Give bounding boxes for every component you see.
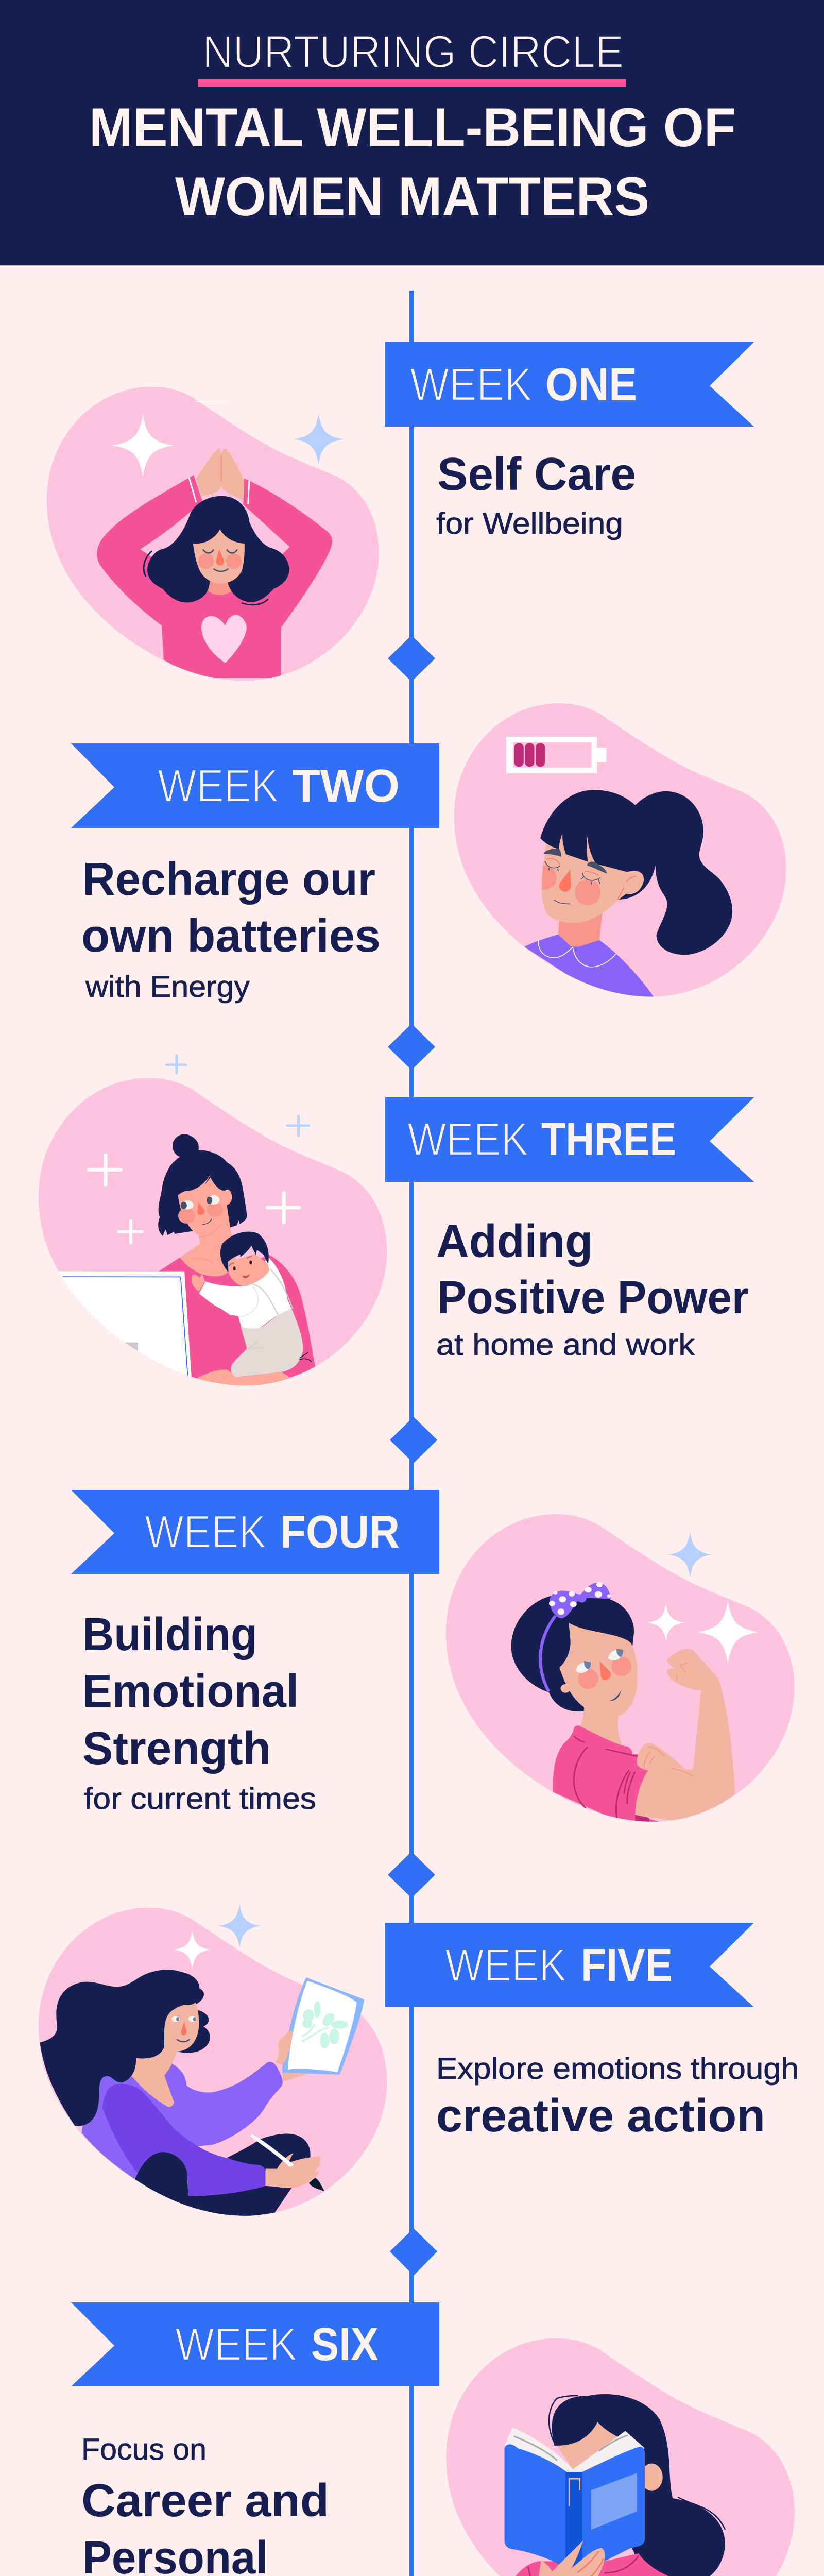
banner: week two: WEEK [158,760,279,812]
subheading: at home and work: at home and work [436,1328,695,1362]
figure: mother and baby [38,1134,316,1388]
banner: week one: ONE [545,359,637,411]
banner: week six [71,2302,439,2386]
eyebrow: nurturing circle: NURTURING CIRCLE [202,26,624,77]
heading: building emotional strength: Emotional [82,1666,299,1717]
heading: recharge our own batteries [81,854,381,962]
icon: sparkles [111,414,344,477]
computer monitor [59,1272,192,1377]
icon: sparkles [647,1532,759,1663]
figure: woman with ponytail [524,790,732,997]
panel: week six [71,2302,795,2576]
baby [199,1257,291,1329]
figure: woman with hands raised [97,448,332,678]
illustration: woman reading book [446,2338,795,2576]
heading: recharge our own batteries: Recharge our [82,854,375,905]
timeline line [409,291,414,2576]
banner: week five: FIVE [581,1940,673,1991]
subheading: for current times: for current times [84,1782,316,1816]
subheading: with energy: with Energy [85,970,250,1004]
icon: sparkles [173,1904,262,1969]
timeline diamonds [388,635,437,2576]
title: WOMEN MATTERS [175,165,649,227]
banner: week three: THREE [541,1114,676,1165]
banner: week five: WEEK [445,1940,566,1991]
icon: plus sparkles [89,1056,309,1243]
banner: week four [71,1490,439,1574]
icon: low battery [506,737,606,773]
icon: open blue book [505,2427,645,2568]
illustration: woman flexing arm [446,1514,795,1824]
title: MENTAL WELL-BEING OF [89,96,736,158]
banner: week one [385,342,754,427]
heading: adding positive power: Positive Power [437,1272,749,1324]
banner: week four: FOUR [280,1506,400,1558]
pink underline [198,79,626,87]
panel: week five [39,1904,799,2216]
heading: career and personal brand [81,2475,329,2576]
banner: week five [385,1923,754,2007]
heading: building emotional strength [82,1609,299,1774]
banner: week four: WEEK [145,1506,266,1558]
panel: week two [71,703,786,1004]
figure: reader [505,2394,725,2576]
banner: week one: WEEK [410,359,532,411]
heading: self care: Self Care [437,449,636,500]
heading: creative action: creative action [436,2090,765,2142]
figure: woman with brush [40,1970,324,2216]
icon: tablet with leaf drawing [275,1977,364,2075]
panel: week four [71,1490,795,1824]
illustration: tired woman with battery [454,703,786,997]
illustration: mother with baby at computer [38,1056,387,1388]
heading: building emotional strength: Building [82,1609,258,1660]
heading: career and personal brand: Career and [81,2475,329,2527]
heading: adding positive power: Adding [436,1216,593,1267]
panel: week one [47,342,754,681]
banner: week six: WEEK [175,2319,297,2370]
banner: week six: SIX [311,2319,379,2370]
text: focus on: Focus on [81,2433,207,2466]
figure: flexing woman with polka dot bow [511,1582,735,1824]
banner: week two: TWO [292,760,400,812]
banner: week two [71,743,439,828]
banner: week three [385,1097,754,1182]
panel: week three [38,1056,754,1388]
illustration: woman painting on tablet [39,1904,387,2216]
title [89,96,736,227]
heading: recharge our own batteries: own batteries [81,910,381,962]
heading: adding positive power [436,1216,749,1324]
header band [0,0,824,266]
icon: heart on sweater [201,615,247,663]
heading: building emotional strength: Strength [82,1723,271,1774]
subheading: for wellbeing: for Wellbeing [436,507,623,540]
text: explore emotions through: Explore emotions through [436,2052,799,2086]
illustration: meditating woman [47,387,379,681]
banner: week three: WEEK [407,1114,528,1165]
